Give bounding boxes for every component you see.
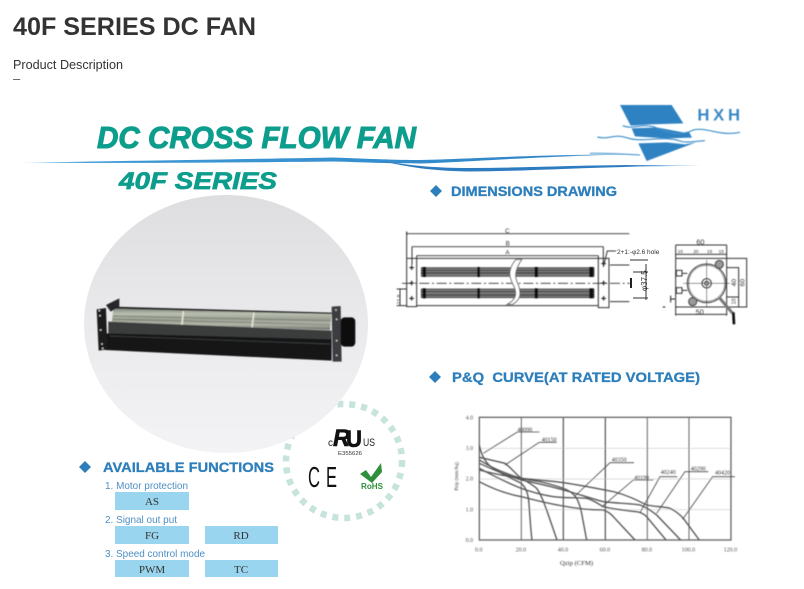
axis labels: 60.0 (600, 547, 610, 553)
banner swoosh (20, 154, 703, 172)
certification: CE: E (326, 462, 337, 494)
heading: dimensions drawing: DIMENSIONS DRAWING (451, 184, 617, 199)
axis labels: 3.0 (466, 446, 473, 452)
product photo: cross flow fan (97, 298, 355, 362)
axis labels: 2.0 (466, 477, 473, 483)
axis labels: 40.0 (558, 547, 568, 553)
heading: available functions: AVAILABLE FUNCTIONS (103, 459, 274, 475)
certification: RoHS: RoHS (361, 482, 384, 491)
series subheading: 40F SERIES (118, 168, 277, 195)
banner heading: DC CROSS FLOW FAN (97, 121, 417, 155)
curve labels: 40350 (612, 458, 627, 464)
side view dimensions drawing: 10 (731, 298, 737, 304)
side view dimensions drawing: 40 (731, 279, 738, 286)
certification: cUL: U (346, 426, 362, 453)
heading: P&Q curve: P&Q CURVE(AT RATED VOLTAGE) (452, 370, 700, 385)
logo: HXH: HXH (697, 105, 740, 124)
curve labels: 40090 (517, 427, 532, 433)
certification: cUL (328, 425, 375, 457)
leader lines (483, 432, 735, 519)
signal output: FG (145, 530, 159, 542)
dash: – (13, 71, 21, 86)
dimension note: hole: 2+1:-φ2.6 hole (617, 249, 660, 256)
axis labels (455, 415, 737, 567)
signal output: RD (233, 530, 249, 542)
certification: cUL: E355626 (338, 451, 362, 457)
axis labels: Pzip (mm/Aq) (455, 462, 460, 491)
certification: cUL: US (363, 437, 375, 449)
axis labels: 20.0 (516, 547, 526, 553)
front view dimensions drawing: B (506, 241, 510, 248)
front view dimensions drawing: 21.8 (396, 294, 402, 304)
dimension φ37.5 (630, 260, 649, 300)
certification: RoHS (360, 463, 384, 491)
axis labels: Qzip (CFM) (560, 560, 593, 567)
logo: HXH (590, 105, 740, 161)
motor protection (105, 480, 189, 510)
axis labels: 100.0 (682, 547, 695, 553)
axis labels: 1.0 (466, 508, 473, 514)
certification: cUL: c (328, 438, 333, 449)
dimension φ37.5: φ37.5 (640, 270, 649, 291)
front view dimensions drawing (396, 228, 630, 308)
curve labels: 40290 (691, 466, 706, 472)
axis labels: 4.0 (466, 415, 473, 421)
side view dimensions drawing: 20 (693, 249, 699, 254)
axis labels: 80.0 (642, 547, 652, 553)
curve labels: 40190 (634, 475, 649, 481)
front view dimensions drawing: A (505, 250, 510, 257)
axis labels: 0.0 (475, 547, 482, 553)
product photo background disc (84, 195, 368, 453)
curve labels (517, 427, 730, 481)
curve labels: 40240 (661, 470, 676, 476)
side view dimensions drawing: 50 (696, 307, 704, 316)
certification: cUL: R (333, 425, 351, 452)
function list (105, 480, 278, 577)
curve labels: 40420 (715, 471, 730, 477)
side view dimensions drawing (663, 237, 747, 324)
product description label: Product Description (13, 57, 123, 72)
side view dimensions drawing: 60 (696, 237, 704, 246)
side view dimensions drawing: 60 (739, 279, 746, 286)
axis labels: 0.0 (466, 538, 473, 544)
side view dimensions drawing: 15 (707, 249, 713, 254)
speed control mode (105, 548, 278, 577)
title: 40F SERIES DC FAN (13, 13, 256, 41)
axis labels: 120.0 (724, 547, 737, 553)
motor protection: 1. Motor protection (105, 480, 188, 492)
speed control mode: 3. Speed control mode (105, 548, 205, 560)
side view dimensions drawing: 10 (678, 249, 683, 254)
front view dimensions drawing: C (505, 228, 510, 235)
motor protection: AS (145, 496, 159, 508)
signal output (105, 514, 278, 544)
certification dotted ring (286, 404, 402, 518)
P&Q line chart (455, 415, 737, 567)
certification: CE: C (308, 462, 320, 494)
chart grid and axes (479, 417, 731, 540)
signal output: 2. Signal out put (105, 514, 177, 526)
speed control mode: TC (234, 564, 248, 576)
speed control mode: PWM (139, 564, 165, 576)
curves (479, 445, 699, 540)
side view dimensions drawing: 15 (719, 249, 724, 254)
curve labels: 40150 (542, 438, 557, 444)
